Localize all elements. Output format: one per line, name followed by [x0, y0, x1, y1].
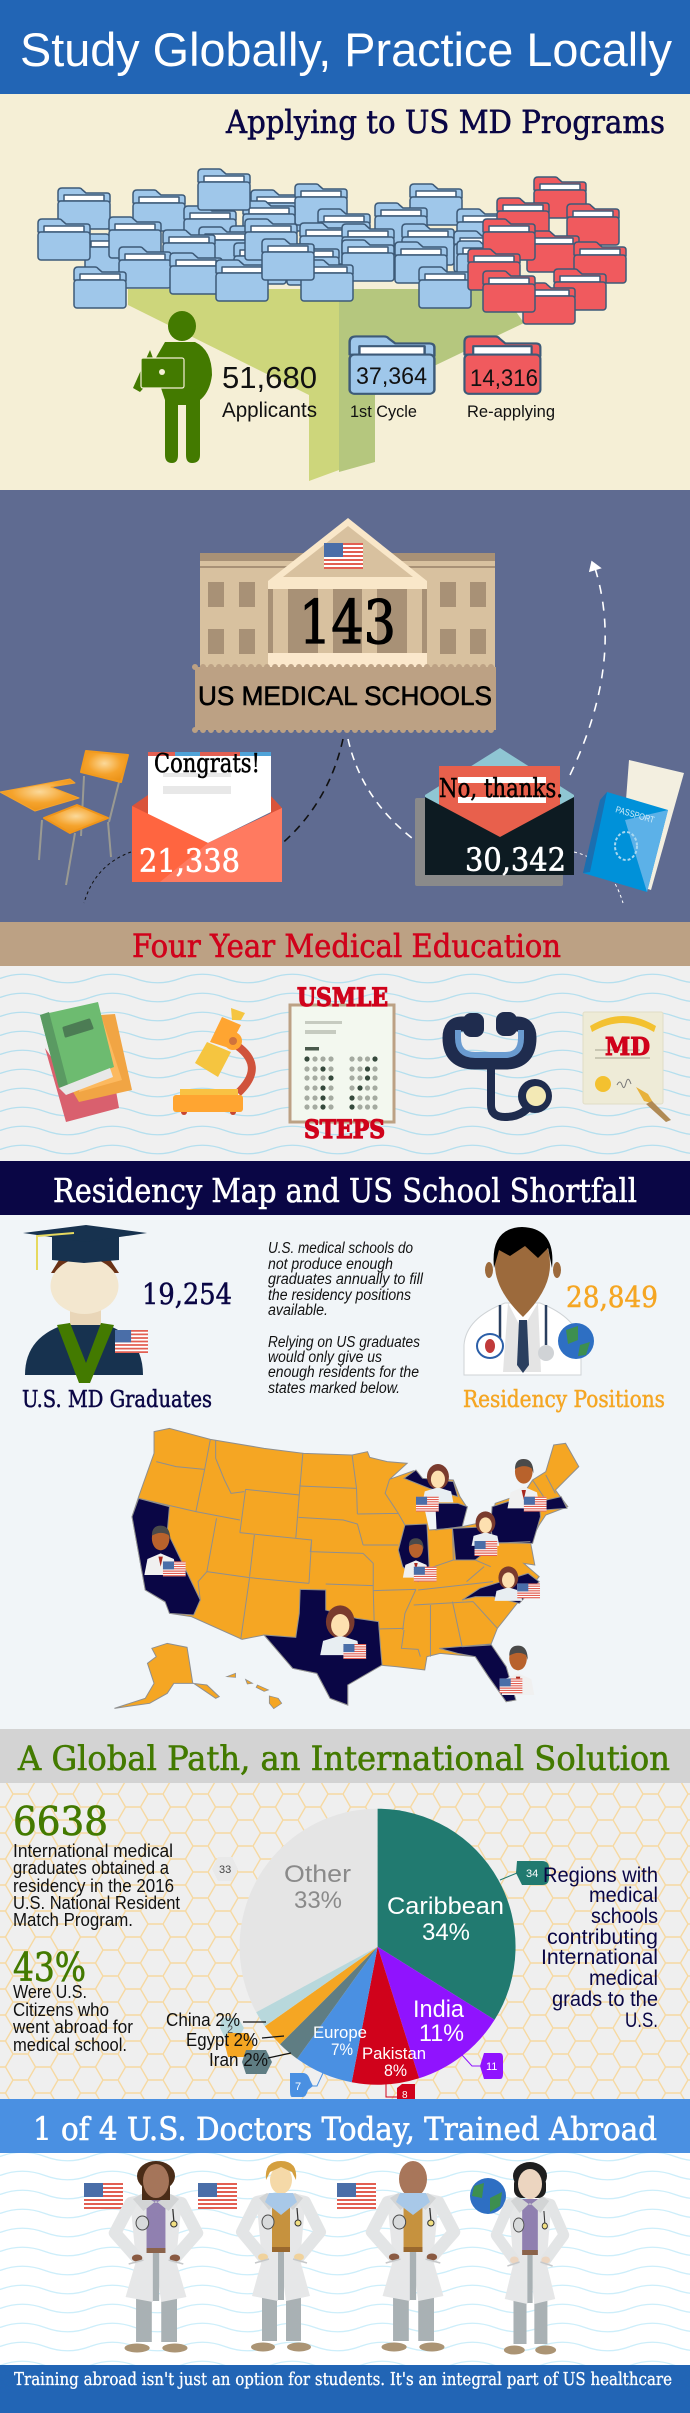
stat: re-applying folder: Re-applying	[467, 402, 555, 421]
text: shortfall explanation: Relying on US graduates	[268, 1334, 420, 1351]
text: match program description: residency in the 2016	[13, 1876, 174, 1896]
chart: pie connectors and value tags: 11	[486, 2061, 497, 2073]
map: state borders	[139, 1439, 555, 1657]
label: USMLE: USMLE	[297, 983, 388, 1012]
label: India	[413, 1996, 465, 2047]
text: regions caption	[541, 1864, 658, 2032]
chart: pie connectors and value tags: 34	[526, 1868, 538, 1880]
chart: pie connectors and value tags: 7	[295, 2081, 301, 2093]
icon: school building	[200, 518, 495, 667]
text: congrats: Congrats!	[154, 749, 260, 779]
text: shortfall explanation: available.	[268, 1302, 328, 1319]
stat: accepted: 21,338	[139, 842, 240, 880]
stat: applicants	[222, 360, 317, 422]
doctor three	[372, 2161, 454, 2352]
heading band: four year medical education: Four Year Medical Education	[132, 927, 561, 965]
panel: international graduates	[0, 1783, 690, 2101]
banner: US medical schools	[195, 667, 496, 730]
chart: pie of medical school regions	[240, 1809, 516, 2085]
panel: doctors	[0, 2153, 690, 2365]
stat: first cycle folder: 1st Cycle	[350, 402, 417, 421]
label: Other: 33%	[294, 1887, 342, 1914]
stat: first cycle folder	[350, 336, 434, 421]
text: US citizens description: Were U.S.	[13, 1982, 87, 2002]
icon: stethoscope	[450, 1012, 552, 1117]
label: Pakistan: 8%	[384, 2061, 407, 2080]
labels: China, Egypt, Iran with leader lines: Iran 2%	[209, 2050, 268, 2070]
label: Europe	[313, 2023, 367, 2059]
text: regions caption: medical	[589, 1967, 658, 1990]
text: shortfall explanation: not produce enough	[268, 1256, 393, 1273]
icon: rejection envelope	[415, 748, 574, 886]
icon: US graduate	[23, 1225, 148, 1383]
icons: blue application folders	[38, 169, 509, 308]
icon: US flag two	[198, 2183, 237, 2209]
chart: US state map	[114, 1428, 579, 1709]
heading band: doctors trained abroad	[0, 2099, 690, 2153]
stat: 43%: 43%	[13, 1946, 86, 1991]
text: regions caption: Regions with	[543, 1864, 658, 1887]
marker: New York doctor	[507, 1459, 547, 1512]
text: US citizens description: medical school.	[13, 2035, 127, 2055]
label: Caribbean: 34%	[422, 1919, 470, 1946]
text: regions caption: U.S.	[625, 2009, 658, 2032]
label: India: India	[413, 1996, 465, 2023]
marker: Texas doctor	[320, 1605, 366, 1659]
text: shortfall explanation: enough residents for the	[268, 1364, 419, 1381]
icon: books	[40, 1002, 132, 1122]
text: regions caption: International	[541, 1946, 658, 1969]
stat: rejected: 30,342	[465, 841, 566, 879]
chart: pie connectors and value tags: 33	[219, 1864, 231, 1876]
icon: passport	[583, 760, 684, 892]
stat: re-applying folder: 14,316	[470, 365, 538, 392]
labels: China, Egypt, Iran with leader lines	[166, 2010, 291, 2070]
label: Pakistan: Pakistan	[362, 2044, 426, 2063]
label: India: 11%	[419, 2020, 464, 2047]
chart: pie connectors and value tags: 2	[227, 2024, 233, 2036]
icon: resident doctor	[464, 1227, 594, 1375]
marker: Florida doctor	[500, 1646, 534, 1695]
text: US citizens description: went abroad for	[12, 2017, 133, 2037]
label: Other: Other	[284, 1861, 351, 1888]
text: shortfall explanation: the residency positions	[268, 1287, 411, 1304]
doctor four	[496, 2162, 564, 2354]
marker: Ohio doctor	[472, 1511, 499, 1556]
icon: applicant with laptop	[133, 311, 212, 463]
header: main title band	[0, 0, 690, 94]
stat: 6638: 6638	[13, 1800, 108, 1845]
arrow: accepted path	[250, 739, 343, 869]
banner: US medical schools: US MEDICAL SCHOOLS	[198, 681, 492, 711]
label: Caribbean	[387, 1893, 504, 1946]
stat: graduates number: 19,254	[142, 1277, 232, 1311]
slice: other	[240, 1809, 378, 2012]
slice: China	[256, 1947, 378, 2026]
stat: first cycle folder: 37,364	[356, 363, 427, 390]
funnel: light green	[128, 289, 339, 481]
label: Other	[284, 1861, 351, 1914]
label: residency positions: Residency Positions	[463, 1387, 665, 1413]
doctor one	[115, 2161, 197, 2352]
text: US citizens description	[12, 1982, 133, 2055]
marker: Michigan doctor	[416, 1464, 453, 1512]
icon: US flag three	[337, 2183, 376, 2209]
map: lake michigan	[425, 1512, 437, 1530]
label: Pakistan	[362, 2044, 426, 2080]
icon: acceptance envelope	[132, 749, 282, 882]
panel: applying to US MD programs	[0, 94, 690, 490]
text: match program description	[13, 1841, 180, 1930]
text: regions caption: schools	[591, 1905, 658, 1928]
exam answer dots	[304, 1056, 378, 1110]
footer band: closing statement	[0, 2365, 690, 2413]
arrow: thin dashes to next section	[84, 852, 623, 903]
marker: Illinois doctor	[403, 1538, 437, 1582]
slice: Pakistan	[352, 1947, 419, 2085]
label: US MD graduates: U.S. MD Graduates	[22, 1387, 212, 1413]
stat: residency positions number: 28,849	[566, 1280, 658, 1314]
marker: North Carolina doctor	[494, 1566, 540, 1601]
panel: four year icons	[0, 966, 690, 1161]
panel: residency map	[0, 1215, 690, 1729]
funnel: darker green	[339, 289, 524, 472]
icon: globe	[470, 2178, 506, 2214]
label: Caribbean: Caribbean	[387, 1893, 504, 1920]
stat: applicants: 51,680	[222, 360, 317, 395]
labels: China, Egypt, Iran with leader lines: Egypt 2%	[186, 2030, 258, 2050]
chart: pie connectors and value tags	[212, 1857, 549, 2101]
heading band: residency map	[0, 1161, 690, 1215]
stat: number of schools: 143	[299, 588, 396, 658]
icon: USMLE exam sheet	[290, 983, 394, 1144]
icon: MD diploma	[583, 1012, 671, 1122]
map: shortfall states	[132, 1470, 567, 1705]
text: shortfall explanation: U.S. medical schools do	[268, 1240, 413, 1257]
title: Study Globally, Practice Locally	[20, 23, 672, 76]
labels: China, Egypt, Iran with leader lines: China 2%	[166, 2010, 240, 2030]
slice: Caribbean	[378, 1809, 516, 2020]
slice: India	[378, 1947, 495, 2078]
heading band: four year medical education	[0, 922, 690, 966]
text: shortfall explanation	[268, 1240, 424, 1397]
text: match program description: International medical	[13, 1841, 173, 1861]
slice: Europe	[297, 1947, 378, 2082]
text: MD: MD	[605, 1032, 650, 1061]
icon: school desk chair	[0, 751, 128, 885]
chart: pie connectors and value tags: 8	[402, 2090, 408, 2101]
icon: US flag	[324, 543, 363, 569]
text: match program description: graduates obtained a	[13, 1858, 170, 1878]
text: shortfall explanation: would only give us	[268, 1349, 382, 1366]
text: no thanks: No, thanks.	[439, 774, 563, 804]
map: contiguous states	[132, 1428, 579, 1705]
map: Alaska	[114, 1643, 219, 1708]
heading band: global path: A Global Path, an International Solution	[17, 1739, 670, 1779]
slice: Iran	[280, 1947, 378, 2059]
icons: red application folders	[468, 177, 626, 324]
stat: re-applying folder	[464, 336, 555, 421]
marker: California doctor	[144, 1526, 186, 1576]
label: Europe: Europe	[313, 2023, 367, 2042]
stat: applicants: Applicants	[222, 399, 317, 422]
arrow: abroad path upward	[570, 562, 605, 775]
text: shortfall explanation: states marked below.	[268, 1380, 400, 1397]
label: STEPS: STEPS	[304, 1115, 385, 1144]
exam filled dots	[304, 1056, 378, 1110]
icon: US flag one	[84, 2183, 123, 2209]
text: shortfall explanation: graduates annually to fill	[268, 1271, 424, 1288]
text: regions caption: contributing	[547, 1926, 658, 1949]
label: Europe: 7%	[331, 2040, 353, 2059]
text: match program description: U.S. National Resident	[13, 1893, 180, 1913]
map: Hawaii	[227, 1673, 282, 1709]
arrow: rejected path	[348, 739, 448, 863]
doctor two	[242, 2161, 320, 2352]
panel: US medical schools	[0, 490, 690, 922]
text: US citizens description: Citizens who	[13, 2000, 109, 2020]
text: regions caption: medical	[589, 1884, 658, 1907]
text: regions caption: grads to the	[552, 1988, 658, 2011]
icon: passport: PASSPORT	[614, 804, 656, 825]
slice: Egypt	[265, 1947, 378, 2044]
icon: microscope	[173, 1008, 252, 1115]
text: match program description: Match Program.	[13, 1910, 133, 1930]
